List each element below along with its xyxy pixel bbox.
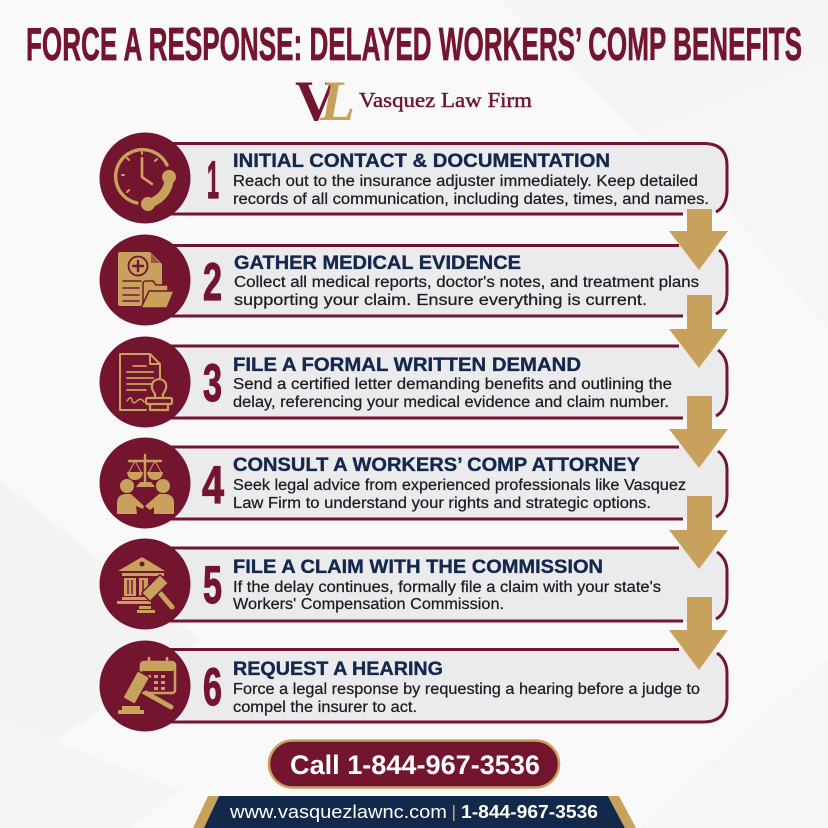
arrow: step 2 to 3 <box>669 295 728 368</box>
panel: step 5 <box>170 548 727 621</box>
call button text: Call 1-844-967-3536 <box>290 750 540 780</box>
arrow: step 3 to 4 <box>669 396 728 468</box>
step 4 text: Law Firm to understand your rights and strategic options. <box>233 495 651 512</box>
step 3 text: delay, referencing your medical evidence and claim number. <box>233 394 669 411</box>
step 3 number: 3 <box>203 354 222 413</box>
step 2 text <box>234 274 699 309</box>
step 5 text: If the delay continues, formally file a claim with your state's <box>233 579 661 596</box>
footer band <box>193 796 636 828</box>
step 3 text <box>233 376 672 411</box>
step 5 text <box>233 579 661 613</box>
logo mark VL <box>295 70 355 133</box>
icon: courthouse and gavel <box>100 538 190 630</box>
panel: step 6 <box>170 650 727 722</box>
step 4 text <box>233 477 686 512</box>
step 2 text: Collect all medical reports, doctor's notes, and treatment plans <box>234 274 699 291</box>
arrow: step 4 to 5 <box>669 496 728 569</box>
step 1 text: Reach out to the insurance adjuster immediately. Keep detailed <box>233 173 698 190</box>
step 2 text: supporting your claim. Ensure everything is current. <box>234 292 647 309</box>
logo mark VL: L <box>319 70 355 133</box>
icon: document and stamp <box>100 336 190 428</box>
step 1 heading: INITIAL CONTACT & DOCUMENTATION <box>233 150 610 172</box>
step 3 text: Send a certified letter demanding benefits and outlining the <box>233 376 672 393</box>
step 5 number: 5 <box>203 556 222 615</box>
arrow: step 1 to 2 <box>669 209 728 270</box>
panel: step 4 <box>170 447 727 519</box>
step 5 heading: FILE A CLAIM WITH THE COMMISSION <box>233 556 603 578</box>
step 6 text: compel the insurer to act. <box>233 699 417 716</box>
step 6 text: Force a legal response by requesting a hearing before a judge to <box>233 681 700 698</box>
arrow: step 5 to 6 <box>669 597 728 670</box>
step 4 text: Seek legal advice from experienced professionals like Vasquez <box>233 477 686 494</box>
call button <box>269 740 559 788</box>
step 1 text <box>233 173 709 208</box>
step 4 heading: CONSULT A WORKERS’ COMP ATTORNEY <box>233 454 640 476</box>
step 1 text: records of all communication, including dates, times, and names. <box>233 191 709 208</box>
footer website: www.vasquezlawnc.com <box>229 801 447 822</box>
panel: step 1 <box>170 143 727 214</box>
logo mark VL: V <box>295 70 337 133</box>
panel: step 3 <box>170 346 727 418</box>
step 2 number: 2 <box>203 253 222 312</box>
panel: step 2 <box>170 245 727 316</box>
logo wordmark: Vasquez Law Firm <box>359 88 532 112</box>
step 3 heading: FILE A FORMAL WRITTEN DEMAND <box>233 354 581 376</box>
step 6 number: 6 <box>203 658 222 717</box>
step 5 text: Workers' Compensation Commission. <box>233 596 504 613</box>
icon: medical document and folder <box>100 234 190 326</box>
step 2 heading: GATHER MEDICAL EVIDENCE <box>234 252 521 274</box>
step 4 number: 4 <box>202 456 224 515</box>
step 6 text <box>233 681 700 716</box>
icon: calendar and gavel <box>100 640 190 732</box>
footer phone: 1-844-967-3536 <box>461 802 598 822</box>
step 6 heading: REQUEST A HEARING <box>233 658 443 680</box>
logo: Vasquez Law Firm <box>295 70 532 133</box>
icon: scales and handshake <box>100 438 190 528</box>
icon: clock and phone <box>100 132 190 224</box>
panel: step 1: 1 <box>207 151 219 210</box>
